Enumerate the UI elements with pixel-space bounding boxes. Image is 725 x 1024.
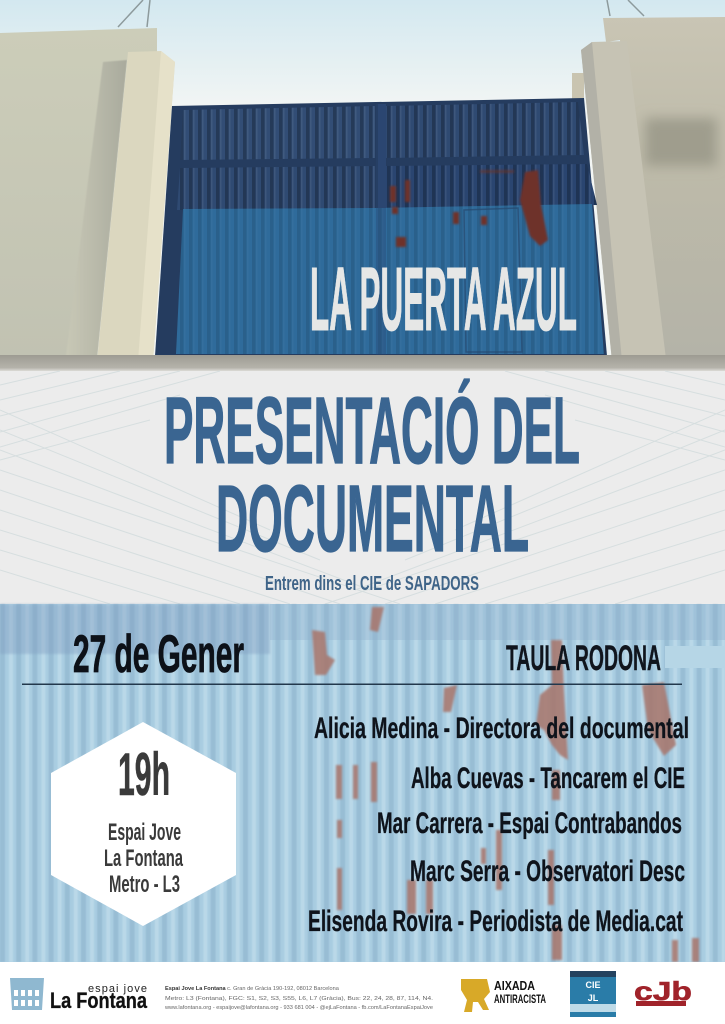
hexagon: time and place: 19h bbox=[118, 741, 170, 808]
logo: La Fontana bbox=[10, 978, 148, 1013]
panel: event details bbox=[0, 604, 725, 962]
logo: CIE: CIE bbox=[585, 980, 601, 990]
heading bbox=[164, 378, 580, 572]
left wall bbox=[0, 28, 157, 358]
logo: Raixada Antiracista: AIXADA bbox=[494, 978, 535, 993]
contact info: www.lafontana.org - espaijove@lafontana.org - 933 681 004 - @ejLaFontana - fb.com/LaFontanaEspaiJove bbox=[164, 1005, 433, 1011]
logo: CJB: cJb bbox=[634, 976, 692, 1006]
gate bbox=[155, 98, 607, 356]
logo: La Fontana: espai jove bbox=[88, 983, 147, 995]
floor bbox=[0, 355, 725, 371]
logo: CIE: JL bbox=[588, 993, 599, 1003]
logo: CIE bbox=[570, 971, 616, 1017]
right pillar bbox=[581, 41, 666, 361]
hexagon: time and place: La Fontana bbox=[104, 845, 183, 872]
date: 27 de Gener bbox=[73, 625, 244, 684]
logo: Raixada Antiracista bbox=[461, 978, 546, 1012]
contact info: Espai Jove La Fontana c. Gran de Gràcia 190-192, 08012 Barcelona bbox=[165, 986, 340, 992]
hexagon: time and place: Metro - L3 bbox=[109, 871, 180, 898]
antennas bbox=[118, 0, 644, 27]
rust stains bbox=[390, 170, 548, 247]
panel: title band bbox=[0, 371, 725, 604]
hexagon: time and place bbox=[51, 722, 236, 926]
small door bbox=[464, 208, 522, 352]
left pillar bbox=[97, 51, 175, 361]
speakers list bbox=[308, 712, 689, 938]
contact info bbox=[164, 986, 434, 1011]
chimney bbox=[572, 73, 584, 99]
right wall bbox=[603, 17, 725, 356]
logo: La Fontana: La Fontana bbox=[50, 988, 148, 1013]
footer bbox=[0, 962, 725, 1024]
photo: blue gate between concrete walls bbox=[0, 0, 725, 371]
rust marks bbox=[312, 607, 699, 962]
subtitle: Entrem dins el CIE de SAPADORS bbox=[265, 573, 479, 595]
logo: Raixada Antiracista: ANTIRACISTA bbox=[494, 992, 546, 1006]
hexagon: time and place: Espai Jove bbox=[108, 819, 181, 846]
contact info: Metro: L3 (Fontana), FGC: S1, S2, S3, S55, L6, L7 (Gràcia), Bus: 22, 24, 28, 87, 114, N4. bbox=[165, 996, 434, 1002]
